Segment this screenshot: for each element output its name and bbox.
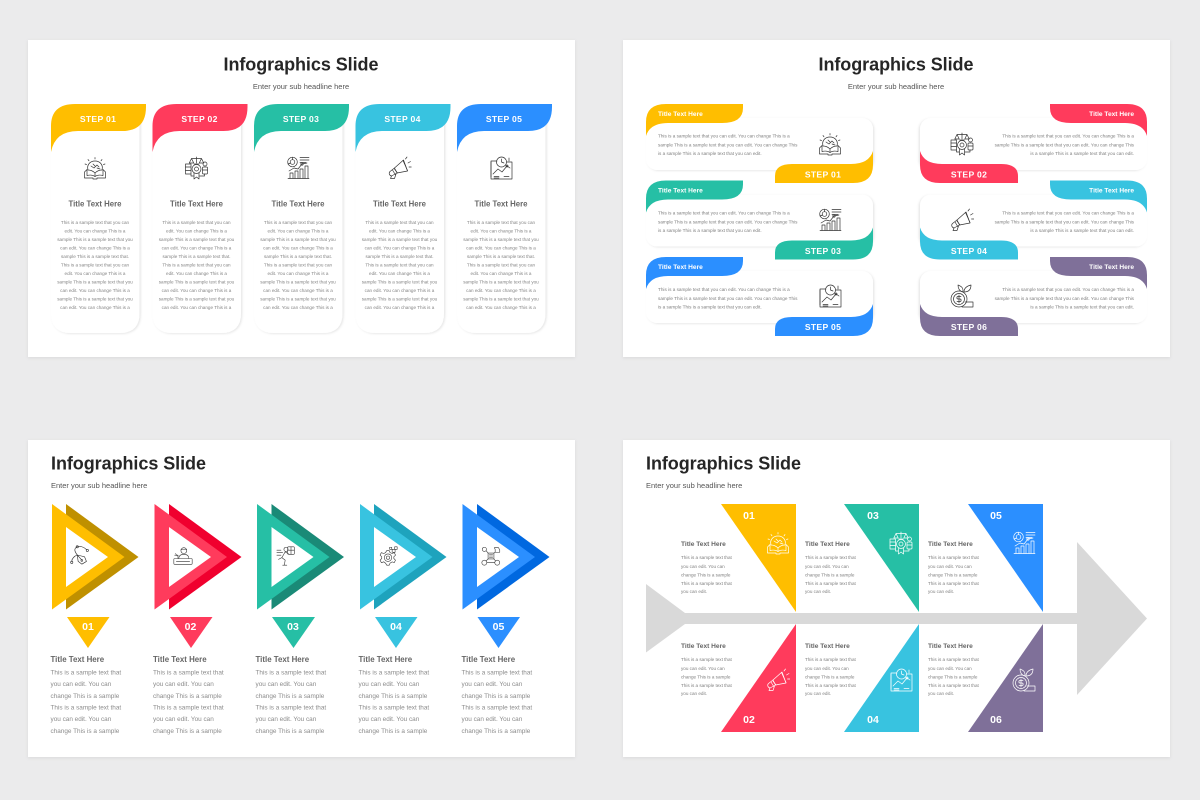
row: step 03: sample This is a sample text that you can edit. You can change This [658,220,798,224]
card: step 01: Title Text Here [68,200,122,208]
step 01: you can edit. You can [681,564,725,569]
step 06: Title Text Here [928,643,973,650]
step 05: 05 [493,621,504,633]
card: step 03: can edit. You can change This is a [263,246,333,250]
step 03: 03 [287,621,299,633]
step 02: you can edit. You can [681,666,725,671]
card: step 02: can edit. You can change This is a [162,305,232,310]
card: step 02 [152,104,248,333]
card: step 02: can edit. You can change This is a [162,288,232,293]
row: step 02: This is a sample text that you can edit. You can change This is a [1002,134,1134,139]
card: step 02: Title Text Here [170,200,224,208]
step 03: Title Text Here [805,541,850,548]
row: step 06: Title Text Here [1089,264,1134,271]
card: step 05: can edit. You can change This is a [466,246,536,250]
step 05: you can edit. [928,589,954,594]
step 06: 06 [990,714,1002,726]
step 04: change This is a sample [805,674,855,679]
card: step 05: sample This is a sample text that you [463,280,539,284]
step 05: you can edit. You can [928,564,972,569]
card: step 01: can edit. You can change This is a [60,288,130,293]
step 02: This is a sample text that [681,657,733,662]
step 04: Title Text Here [358,655,413,664]
card: step 05: This is a sample text that you can [467,220,536,225]
step 03: you can edit. You can [256,681,317,688]
step 05: Title Text Here [928,541,973,548]
step 04 [805,624,919,732]
step 01 [50,504,138,735]
card: step 04: can edit. You can change This is a [365,288,435,293]
card: step 04: sample This is a sample text that you [362,237,438,242]
step 06: This is a sample text that [928,683,980,688]
step 05: Title Text Here [462,655,516,664]
step 02: you can edit. You can [153,681,214,688]
card: step 01: sample This is a sample text that. [61,254,129,259]
card: step 01: sample This is a sample text that you [57,237,133,242]
step 05 [462,504,550,735]
card: step 04 [356,104,450,333]
step 03: change This is a sample [256,728,325,735]
card: step 04: sample This is a sample text that you [362,280,438,284]
step 05: you can edit. You can [462,716,523,723]
step 05: change This is a sample [928,572,978,577]
step 02: 02 [185,621,196,633]
step 03: you can edit. You can [256,716,317,723]
step 04: This is a sample text that [358,704,429,712]
step 02: This is a sample text that [153,704,224,712]
row: step 04: sample This is a sample text that you can edit. You can change This [995,220,1135,224]
card: step 05: STEP 05 [486,114,522,124]
step 01 [681,504,796,612]
row: step 05: sample This is a sample text that you can edit. You can change This [658,296,798,301]
row: step 02: Title Text Here [1089,111,1134,118]
step 05: change This is a sample [462,693,531,700]
step 03: 03 [867,510,879,522]
card: step 03: edit. You can change This is a [268,229,329,234]
card: step 02: sample This is a sample text that you [159,237,235,242]
card: step 03 [254,104,349,333]
row: step 01: is a sample This is a sample text that you can edit. [658,151,762,156]
card: step 05: sample This is a sample text that you [463,296,539,302]
row: step 01: Title Text Here [658,111,703,118]
card: step 03: This is a sample text that you can [264,220,333,225]
step 06: change This is a sample [928,674,978,679]
step 04 [358,504,446,735]
step 02: Title Text Here [153,655,207,664]
step 03: This is a sample text that [805,555,857,560]
card: step 02: edit. You can change This is a [166,229,227,234]
step 06: This is a sample text that [928,657,980,662]
sub headline: Enter your sub headline here [646,481,742,490]
card: step 03: sample This is a sample text that you [260,237,336,242]
card: step 04: can edit. You can change This is a [365,305,435,310]
card: step 04: edit. You can change This is a [369,229,430,234]
step 05: This is a sample text that [928,581,980,586]
card: step 02: sample This is a sample text that. [162,254,231,259]
card: step 01: edit. You can change This is a [65,271,126,276]
card: step 04: This is a sample text that you can [365,262,434,268]
step 03: This is a sample text that [256,704,326,712]
card: step 05: sample This is a sample text that. [467,254,535,259]
card: step 02: sample This is a sample text that you [159,296,235,302]
card: step 01: sample This is a sample text that you [57,296,133,302]
row: step 01: sample This is a sample text that you can edit. You can change This [658,142,798,148]
card: step 03: sample This is a sample text that you [260,280,336,284]
card: step 01: This is a sample text that you can [61,220,130,225]
card: step 04: can edit. You can change This is a [365,246,435,250]
card: step 03: can edit. You can change This is a [263,305,333,310]
card: step 01: This is a sample text that you can [61,262,130,268]
heading: Infographics Slide [646,454,801,474]
step 05: 05 [990,510,1002,522]
step 03 [805,504,919,612]
step 05: This is a sample text that [928,555,980,560]
step 04: This is a sample text that [805,657,857,662]
row: step 05: Title Text Here [658,264,703,271]
step 02: change This is a sample [153,728,222,735]
card: step 05: can edit. You can change This is a [466,305,536,310]
step 02: change This is a sample [153,693,222,700]
step 04: you can edit. [805,691,831,696]
row: step 06: is a sample This is a sample text that you can edit. [1030,304,1134,309]
row: step 01: This is a sample text that you can edit. You can change This is a [658,134,790,139]
card: step 05: Title Text Here [474,200,528,208]
card: step 05: sample This is a sample text that you [463,237,539,242]
step 01: This is a sample text that [50,704,121,712]
card: step 02: sample This is a sample text that you [159,280,235,284]
step 05 [928,504,1043,612]
step 01: This is a sample text that [681,581,733,586]
step 02 [153,504,242,735]
step 01: change This is a sample [50,693,120,700]
heading: Infographics Slide [51,454,206,474]
step 04: change This is a sample [358,728,428,735]
card: step 04: STEP 04 [384,114,421,124]
step 03: you can edit. [805,589,831,594]
step 03: you can edit. You can [805,564,849,569]
step 01: change This is a sample [681,572,731,577]
row: step 03: Title Text Here [658,188,703,194]
step 05: you can edit. You can [462,681,523,688]
row: step 06: This is a sample text that you can edit. You can change This is a [1002,287,1134,292]
card: step 01: can edit. You can change This is a [60,305,130,310]
row: step 03: is a sample This is a sample text that you can edit. [658,228,762,233]
card: step 01: sample This is a sample text that you [57,280,133,284]
arrow: central spine [646,542,1147,695]
row: step 04: is a sample This is a sample text that you can edit. [1030,228,1134,233]
row: step 04: This is a sample text that you can edit. You can change This is a [1002,211,1134,216]
step 03: change This is a sample [256,693,325,700]
card: step 02: edit. You can change This is a [166,271,227,276]
step 01: 01 [743,510,755,522]
step 02: you can edit. [681,691,707,696]
card: step 04: sample This is a sample text that you [362,296,438,302]
card: step 05: This is a sample text that you can [467,262,536,268]
card: step 05 [457,104,552,333]
step 02: 02 [743,714,755,726]
step 06: you can edit. You can [928,666,972,671]
step 03: change This is a sample [805,572,855,577]
step 03: This is a sample text that [256,670,326,676]
card: step 01 [51,104,146,333]
step 05: change This is a sample [462,728,531,735]
card: step 04: Title Text Here [373,200,427,208]
step 02: you can edit. You can [153,716,214,723]
card: step 01: edit. You can change This is a [65,229,126,234]
card: step 02: This is a sample text that you can [162,220,231,225]
panel: horizontal step rows [623,40,1170,357]
row: step 02: sample This is a sample text that you can edit. You can change This [995,142,1135,148]
step 04: 04 [867,714,879,726]
step 02: Title Text Here [681,643,726,650]
step 04: Title Text Here [805,643,850,650]
card: step 03: edit. You can change This is a [268,271,329,276]
step 03 [256,504,344,735]
row: step 02: STEP 02 [951,170,987,180]
step 02: change This is a sample [681,674,731,679]
row: step 05: is a sample This is a sample text that you can edit. [658,304,762,309]
step 04: 04 [390,621,402,633]
step 03: Title Text Here [256,655,310,664]
row: step 06: sample This is a sample text that you can edit. You can change This [995,296,1135,301]
row: step 03: This is a sample text that you can edit. You can change This is a [658,211,790,216]
step 01: you can edit. [681,589,707,594]
heading: Infographics Slide [224,54,378,74]
step 03: This is a sample text that [805,581,857,586]
row: step 05 [646,257,873,336]
step 02: This is a sample text that [681,683,733,688]
step 05: This is a sample text that [462,704,532,712]
card: step 03: STEP 03 [283,114,319,124]
step 01: This is a sample text that [50,670,121,676]
step 01: you can edit. You can [50,716,112,723]
card: step 03: This is a sample text that you can [264,262,333,268]
step 04: This is a sample text that [358,670,429,676]
card: step 03: Title Text Here [271,200,325,208]
step 05: This is a sample text that [462,670,532,676]
row: step 02: is a sample This is a sample text that you can edit. [1030,151,1134,156]
heading: Infographics Slide [818,54,974,74]
sub headline: Enter your sub headline here [51,481,147,490]
row: step 05: STEP 05 [805,322,841,332]
row: step 04 [920,180,1147,260]
card: step 05: can edit. You can change This is a [466,288,536,293]
card: step 01: STEP 01 [80,114,116,124]
card: step 02: This is a sample text that you can [162,262,231,268]
step 06 [928,624,1043,732]
row: step 04: Title Text Here [1089,188,1134,194]
card: step 04: edit. You can change This is a [369,271,430,276]
row: step 05: This is a sample text that you can edit. You can change This is a [658,287,790,292]
card: step 05: edit. You can change This is a [471,271,532,276]
step 01: This is a sample text that [681,555,733,560]
step 01: Title Text Here [50,655,105,664]
step 01: Title Text Here [681,541,726,548]
step 04: This is a sample text that [805,683,857,688]
step 01: 01 [82,621,94,633]
step 02 [681,624,796,732]
row: step 01: STEP 01 [805,170,841,180]
step 01: you can edit. You can [50,681,112,688]
step 06: you can edit. [928,691,954,696]
step 04: you can edit. You can [805,666,849,671]
row: step 06 [920,257,1147,336]
card: step 03: sample This is a sample text that you [260,296,336,302]
row: step 03 [646,180,873,260]
step 04: you can edit. You can [358,716,420,723]
card: step 02: can edit. You can change This is a [162,246,232,250]
card: step 02: STEP 02 [181,114,218,124]
row: step 04: STEP 04 [951,246,987,256]
card: step 03: sample This is a sample text that. [264,254,332,259]
step 04: you can edit. You can [358,681,420,688]
panel: fishbone arrow [623,440,1170,757]
row: step 06: STEP 06 [951,322,987,332]
step 01: change This is a sample [50,728,120,735]
row: step 02 [920,104,1147,183]
row: step 01 [646,104,873,183]
card: step 04: This is a sample text that you can [365,220,434,225]
panel: triangle steps [28,440,575,757]
panel: vertical step cards [28,40,575,357]
card: step 01: can edit. You can change This is a [60,246,130,250]
card: step 03: can edit. You can change This is a [263,288,333,293]
card: step 05: edit. You can change This is a [471,229,532,234]
sub headline: Enter your sub headline here [253,82,349,91]
step 02: This is a sample text that [153,670,224,676]
sub headline: Enter your sub headline here [848,82,944,91]
card: step 04: sample This is a sample text that. [365,254,434,259]
step 04: change This is a sample [358,693,428,700]
row: step 03: STEP 03 [805,246,841,256]
